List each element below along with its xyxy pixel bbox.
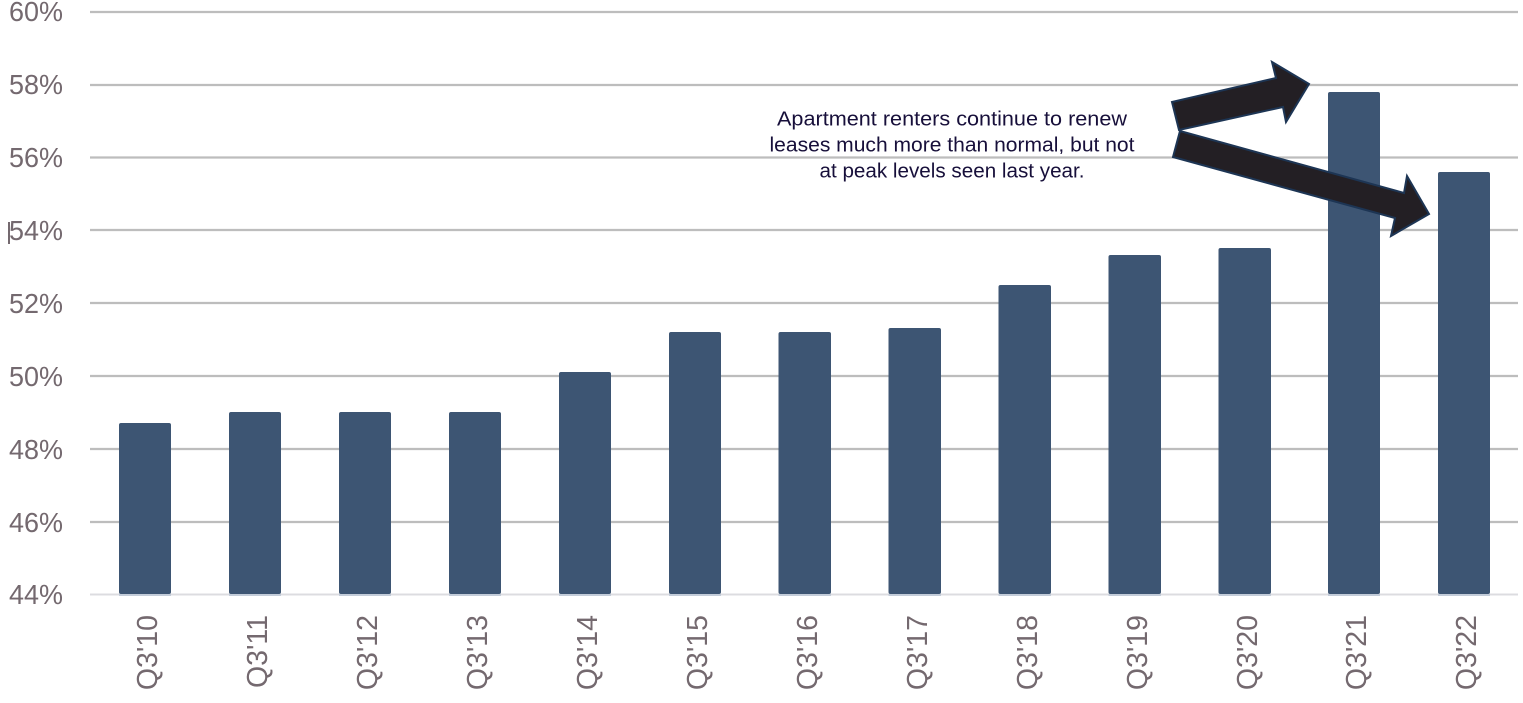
x axis labels <box>132 615 1483 690</box>
annotation text <box>770 108 1135 182</box>
x axis labels: Q3'13 <box>462 615 494 690</box>
y axis labels: 52% <box>9 288 63 319</box>
y axis labels: 44% <box>9 579 63 610</box>
annotation text: leases much more than normal, but not <box>770 134 1135 156</box>
y axis labels: 54% <box>9 215 63 246</box>
arrow: down to Q3'22 bar <box>1173 131 1429 236</box>
y axis labels: 46% <box>9 507 63 538</box>
annotation text: Apartment renters continue to renew <box>777 108 1127 130</box>
arrow: up to Q3'21 bar <box>1172 62 1309 130</box>
bars <box>119 92 1490 596</box>
x axis labels: Q3'18 <box>1012 615 1044 690</box>
x axis labels: Q3'22 <box>1451 615 1483 690</box>
x axis labels: Q3'15 <box>682 615 714 690</box>
y axis labels: 56% <box>9 142 63 173</box>
annotation text: at peak levels seen last year. <box>820 160 1084 182</box>
x axis labels: Q3'11 <box>242 615 274 688</box>
y axis labels: 50% <box>9 361 63 392</box>
x axis labels: Q3'20 <box>1232 615 1264 690</box>
y axis labels: 48% <box>9 434 63 465</box>
x axis labels: Q3'21 <box>1341 615 1373 690</box>
x axis labels: Q3'17 <box>902 615 934 690</box>
y axis labels: 58% <box>9 69 63 100</box>
x axis labels: Q3'14 <box>572 615 604 690</box>
x axis labels: Q3'12 <box>352 615 384 690</box>
y axis labels <box>8 0 63 610</box>
x axis labels: Q3'16 <box>792 615 824 690</box>
x axis labels: Q3'19 <box>1122 615 1154 690</box>
x axis labels: Q3'10 <box>132 615 164 690</box>
